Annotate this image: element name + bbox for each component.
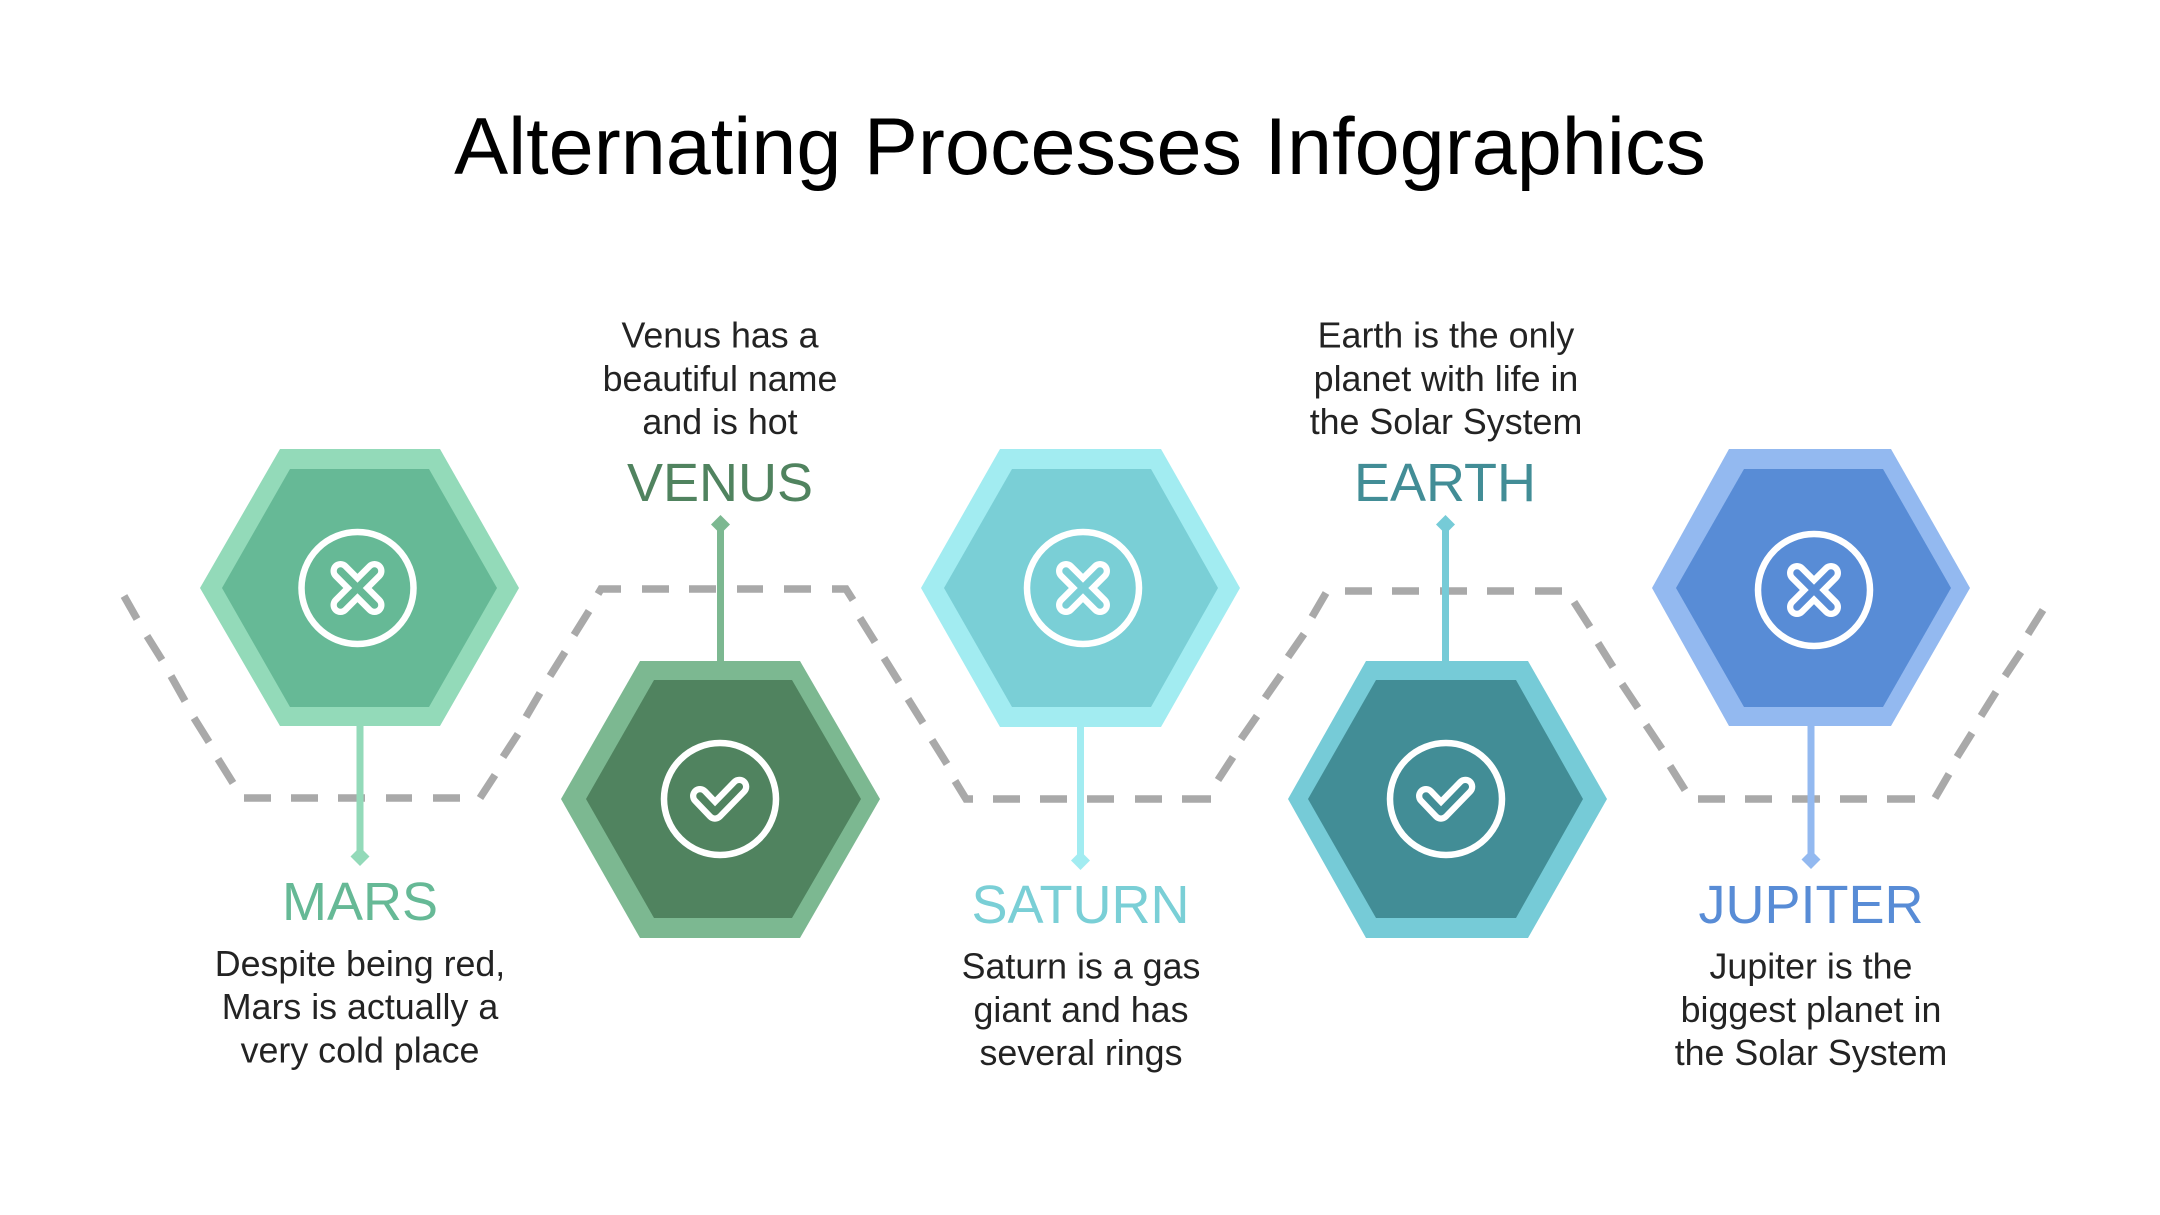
hexagon: Earth xyxy=(1288,661,1607,938)
description: Venus: beautiful name xyxy=(603,359,837,399)
description: Jupiter: the Solar System xyxy=(1675,1033,1947,1073)
hexagon: Mars xyxy=(200,449,519,726)
hexagon: Saturn xyxy=(921,449,1240,727)
connector: Mars xyxy=(350,726,370,866)
description: Mars: very cold place xyxy=(241,1030,479,1070)
name: Jupiter: JUPITER xyxy=(1698,875,1924,935)
description: Earth: the Solar System xyxy=(1310,402,1582,442)
icon: cross in circle xyxy=(1758,534,1870,646)
icon: cross in circle xyxy=(1027,532,1139,644)
description: Mars: Despite being red, xyxy=(215,944,505,984)
hexagon: Venus xyxy=(561,661,880,938)
name: Earth: EARTH xyxy=(1354,453,1536,513)
description: Jupiter: biggest planet in xyxy=(1681,990,1941,1030)
description: Saturn: Saturn is a gas xyxy=(962,946,1200,986)
description: Saturn: several rings xyxy=(980,1033,1182,1073)
description: Venus: and is hot xyxy=(642,402,798,442)
title: Alternating Processes Infographics xyxy=(454,102,1706,192)
connector: Saturn xyxy=(1071,727,1090,870)
panel: Mars xyxy=(200,449,519,1070)
panel: Earth xyxy=(1288,315,1607,938)
icon: check in circle xyxy=(1390,743,1502,855)
description: Saturn: giant and has xyxy=(974,990,1188,1030)
connector: Jupiter xyxy=(1802,726,1820,869)
description: Earth: Earth is the only xyxy=(1318,315,1574,355)
name: Venus: VENUS xyxy=(627,453,813,513)
panel: Jupiter xyxy=(1652,449,1970,1073)
name: Saturn: SATURN xyxy=(971,875,1190,935)
icon: cross in circle xyxy=(302,532,414,644)
description: Mars: Mars is actually a xyxy=(222,987,498,1027)
dashed alternating connector path xyxy=(124,589,2043,799)
panel: Saturn xyxy=(921,449,1240,1073)
connector: Earth xyxy=(1436,515,1455,661)
description: Jupiter: Jupiter is the xyxy=(1710,946,1912,986)
panel: Venus xyxy=(561,315,880,938)
icon: check in circle xyxy=(664,743,776,855)
hexagon: Jupiter xyxy=(1652,449,1970,726)
description: Venus: Venus has a xyxy=(621,315,819,355)
connector: Venus xyxy=(711,515,730,661)
name: Mars: MARS xyxy=(282,872,438,932)
description: Earth: planet with life in xyxy=(1314,359,1578,399)
